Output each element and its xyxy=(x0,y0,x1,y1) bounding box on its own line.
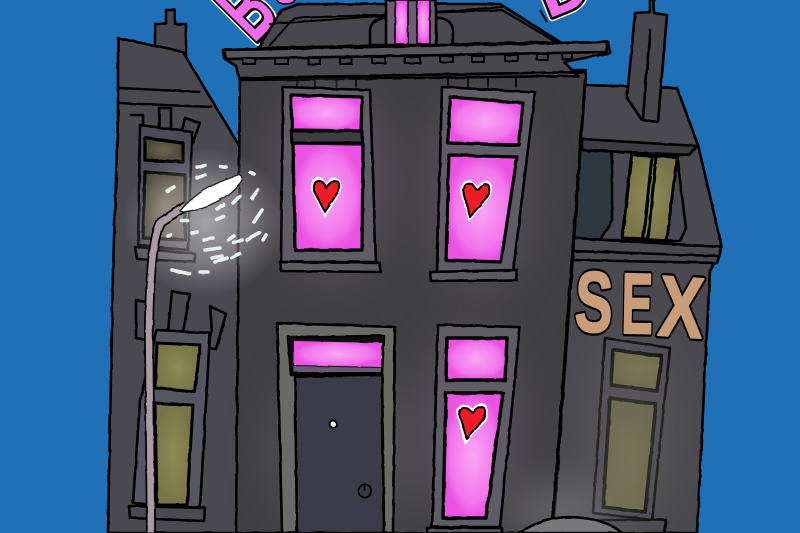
lower right sill xyxy=(427,528,502,533)
dormer xyxy=(574,139,697,241)
heart lower right xyxy=(456,404,488,445)
SEX wall lettering: E xyxy=(621,255,654,352)
left lower sill xyxy=(129,506,205,521)
main facade windows and door xyxy=(277,80,622,533)
door handle xyxy=(358,484,372,498)
balcony ledge xyxy=(570,238,722,263)
upper right window xyxy=(430,87,535,281)
left lower window xyxy=(129,291,226,521)
roof turret xyxy=(370,18,453,45)
upper left window xyxy=(280,87,381,272)
upper left sill xyxy=(280,262,381,272)
main building xyxy=(236,70,586,533)
lamp pole xyxy=(149,206,186,533)
line-art building group xyxy=(108,0,722,533)
left upper window xyxy=(131,108,200,262)
right lower window xyxy=(593,338,670,533)
street lamp light glow xyxy=(123,148,287,296)
lower right window xyxy=(427,325,520,533)
street lamp xyxy=(149,165,266,533)
left building xyxy=(108,10,240,533)
window glows on wall xyxy=(270,80,675,533)
left upper sill xyxy=(135,247,195,262)
lamp light dashes xyxy=(167,165,266,274)
roof details xyxy=(270,0,556,45)
SEX wall lettering: E xyxy=(621,255,654,352)
door peephole xyxy=(330,420,336,428)
SEX wall lettering: S xyxy=(573,254,615,351)
right building xyxy=(553,0,722,533)
right lower sill xyxy=(598,520,666,533)
cornice xyxy=(223,42,610,87)
SEX wall lettering: X xyxy=(656,258,707,357)
roof dome xyxy=(258,4,560,48)
rooftop neon sign letters xyxy=(196,0,600,58)
heart upper right xyxy=(460,180,492,222)
SEX wall lettering: X xyxy=(656,258,707,357)
upper right sill xyxy=(430,270,517,281)
SEX wall lettering xyxy=(573,254,707,357)
lamp head xyxy=(180,175,242,212)
chimney right xyxy=(627,0,667,122)
dome at bottom xyxy=(518,517,622,533)
door xyxy=(277,323,395,533)
divider line main/right xyxy=(553,80,585,517)
chimney left xyxy=(155,10,186,60)
SEX wall lettering: S xyxy=(573,254,615,351)
illustration: house at night xyxy=(106,0,723,533)
heart upper left xyxy=(311,177,342,218)
